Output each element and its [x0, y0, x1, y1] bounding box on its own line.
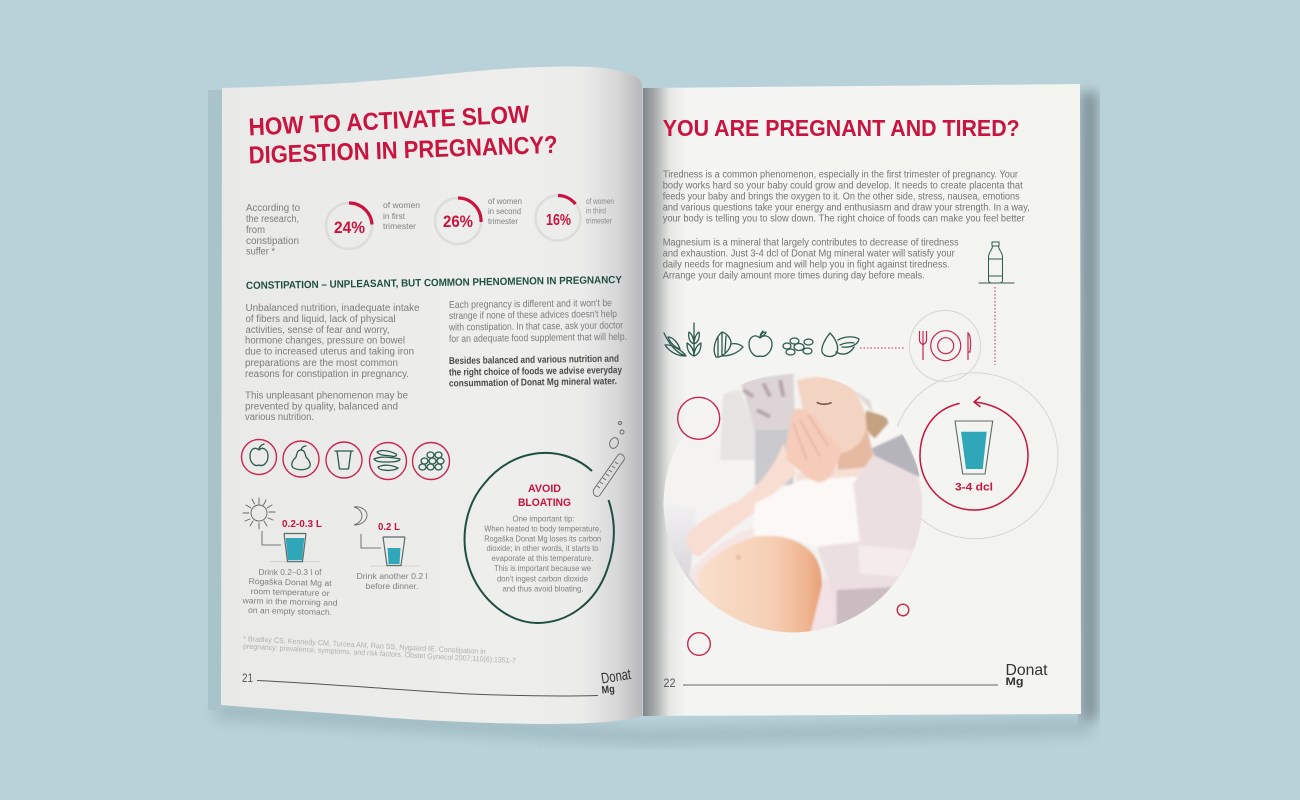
text block: magnesium: Arrange your daily amount more times during day before meals.	[663, 270, 925, 281]
text: drink 0.2-0.3 l: warm in the morning and	[241, 596, 338, 608]
label: third trimester: of women	[586, 197, 614, 206]
icon: beans in circle	[370, 442, 406, 480]
label: first trimester	[383, 201, 420, 231]
icon: plate with fork and knife	[910, 310, 980, 382]
text block: bold recommendation: Besides balanced and various nutrition and	[449, 354, 619, 367]
left forearm	[687, 443, 797, 557]
white top	[754, 476, 858, 544]
decorative circle small	[897, 604, 909, 616]
neck	[836, 426, 874, 471]
chest	[796, 466, 864, 482]
text block: magnesium	[663, 237, 959, 281]
logo: Donat Mg right: Donat	[1006, 662, 1048, 679]
strap and wrap left	[688, 527, 755, 590]
diagram: glass 0.2-0.3 L	[262, 531, 320, 562]
panel: right page	[643, 84, 1081, 716]
callout: avoid bloating: Rogaška Donat Mg loses its carbon	[484, 534, 602, 543]
text: drink another	[356, 572, 428, 591]
label: first trimester: trimester	[383, 222, 416, 231]
arrow: cycle around glass	[920, 397, 1028, 510]
callout: avoid bloating	[465, 453, 614, 623]
text block: magnesium: daily needs for magnesium and will help you in fight against tiredness.	[663, 259, 950, 270]
text: according to the research: the research,	[246, 214, 299, 225]
text block: tiredness: body works hard so your baby could grow and develop. It needs to create placenta that	[663, 180, 1023, 191]
page number 21: 21	[242, 673, 253, 685]
text block: causes of constipation: of fibers and liquid, lack of physical	[246, 314, 396, 325]
blossom branches	[720, 390, 755, 460]
logo: Donat Mg left	[600, 666, 633, 696]
text block: each pregnancy is different: with constipation. In that case, ask your doctor	[448, 320, 624, 334]
donut chart: 26% second trimester	[435, 198, 481, 244]
text: according to the research: suffer *	[246, 246, 275, 258]
connector: dotted line food to plate	[860, 347, 905, 349]
text: drink 0.2-0.3 l: Rogaška Donat Mg at	[248, 577, 332, 588]
text block: bold recommendation: the right choice of foods we advise everyday	[449, 365, 622, 378]
heading: how to activate slow digestion: DIGESTION IN PREGNANCY?	[248, 132, 558, 169]
text: according to the research: from	[246, 225, 265, 236]
logo: Donat Mg right	[1006, 662, 1048, 688]
callout: avoid bloating: AVOID	[528, 483, 561, 495]
text block: tiredness	[663, 169, 1030, 224]
navel	[736, 555, 741, 560]
icon: apple in circle	[242, 440, 276, 474]
label: third trimester: trimester	[586, 216, 612, 226]
icon: wheat	[664, 323, 701, 356]
text: drink 0.2-0.3 l: room temperature or	[250, 587, 330, 598]
hair	[865, 410, 888, 438]
arrow: dotted line from bottle	[994, 287, 996, 365]
logo: Donat Mg left: Donat	[600, 666, 633, 687]
text block: causes of constipation: various nutrition.	[245, 412, 314, 423]
callout: avoid bloating: don't ingest carbon dioxide	[497, 574, 588, 583]
text: drink 0.2-0.3 l	[241, 568, 338, 617]
subheading: constipation: CONSTIPATION – UNPLEASANT, BUT COMMON PHENOMENON IN PREGNANCY	[246, 274, 622, 292]
text block: causes of constipation: preparations are the most common	[245, 358, 398, 369]
icon: thermometer and bubbles	[593, 422, 624, 496]
callout: avoid bloating: When heated to body temperature,	[484, 524, 601, 533]
footnote: pregnancy: prevalence, symptoms, and risk factors. Obstet Gynecol 2007;110(6):1351-7	[243, 642, 516, 665]
page number 22: 22	[664, 678, 676, 690]
callout: avoid bloating: One important tip:	[512, 515, 574, 524]
text block: bold recommendation: consummation of Donat Mg mineral water.	[449, 376, 617, 389]
logo: Donat Mg right: Mg	[1006, 676, 1024, 688]
icon: nuts	[783, 338, 813, 355]
text block: causes of constipation: activities, sense of fear and worry,	[246, 325, 390, 336]
icon: sunflower seed	[714, 332, 743, 357]
icon: pear in circle	[283, 441, 319, 477]
donut chart: 24% first trimester: 24%	[334, 219, 365, 237]
illustration: large grey circle with glass	[892, 373, 1058, 539]
icon: sun	[243, 498, 275, 529]
sleeve cuff	[858, 545, 913, 577]
logo: Donat Mg left: Mg	[601, 683, 615, 696]
label: third trimester	[586, 197, 614, 226]
label: second trimester: in second	[488, 207, 521, 216]
closed eye	[817, 402, 832, 404]
dark wedge	[898, 557, 923, 590]
text block: magnesium: and exhaustion. Just 3-4 dcl of Donat Mg mineral water will satisfy your	[663, 248, 955, 259]
icon: yogurt cup in circle	[326, 442, 362, 478]
grey wedge right	[872, 434, 923, 477]
text: drink 0.2-0.3 l: Drink 0.2–0.3 l of	[258, 568, 322, 577]
text: drink another: before dinner.	[366, 582, 418, 591]
callout: avoid bloating: dioxide; in other words, it starts to	[486, 544, 599, 553]
donut chart: 24% first trimester	[326, 203, 372, 249]
photo: pregnant woman	[660, 370, 927, 637]
text block: causes of constipation: This unpleasant phenomenon may be	[245, 390, 408, 402]
heading: you are pregnant and tired: YOU ARE PREGNANT AND TIRED?	[663, 115, 1020, 141]
icon: almonds	[822, 333, 859, 356]
text block: causes of constipation: due to increased uterus and taking iron	[245, 346, 414, 358]
lower garment shade	[837, 587, 897, 627]
text: according to the research	[246, 203, 300, 258]
text block: each pregnancy is different	[448, 298, 627, 345]
lilac shade lower left	[666, 522, 701, 594]
label: third trimester: in third	[586, 206, 606, 216]
belly	[697, 536, 822, 637]
text block: causes of constipation: Unbalanced nutrition, inadequate intake	[246, 303, 420, 314]
text: drink another: Drink another 0.2 l	[356, 572, 428, 581]
label: second trimester: trimester	[488, 217, 518, 226]
text block: tiredness: and various questions take your energy and enthusiasm and draw your strength. In a way,	[663, 202, 1030, 213]
icon: bottle	[979, 242, 1014, 283]
heading: how to activate slow digestion: HOW TO ACTIVATE SLOW	[248, 101, 531, 141]
text block: magnesium: Magnesium is a mineral that largely contributes to decrease of tiredness	[663, 237, 959, 248]
callout: avoid bloating: BLOATING	[518, 497, 571, 509]
donut chart: 16% third trimester	[536, 196, 580, 240]
label: first trimester: of women	[383, 201, 420, 210]
callout: avoid bloating: and thus avoid bloating.	[502, 584, 584, 593]
callout: avoid bloating: evaporate at this temperature.	[492, 554, 594, 563]
text block: causes of constipation	[245, 303, 420, 423]
icon: glass	[955, 421, 993, 474]
cardigan	[817, 455, 922, 627]
diagram: glass 0.2 L	[361, 534, 420, 566]
towel	[866, 410, 898, 438]
book shadow	[208, 90, 1098, 745]
label: second trimester: of women	[488, 197, 522, 206]
text block: tiredness: feeds your baby and brings the oxygen to it. On the other side, stress, nausea, emotions	[663, 191, 1020, 202]
icon: moon	[354, 507, 367, 525]
hands	[786, 409, 841, 482]
footnote	[243, 634, 516, 665]
donut chart: 16% third trimester: 16%	[546, 212, 571, 229]
text block: tiredness: your body is telling you to slow down. The right choice of foods can make you feel better	[663, 213, 1025, 224]
window	[755, 428, 793, 485]
text: according to the research: constipation	[246, 236, 299, 247]
decorative circle medium	[688, 633, 710, 655]
label: second trimester	[488, 197, 522, 226]
text block: tiredness: Tiredness is a common phenomenon, especially in the first trimester of pregnancy. Your	[663, 169, 1019, 180]
text block: each pregnancy is different: Each pregnancy is different and it won't be	[449, 298, 612, 311]
text block: causes of constipation: hormone changes, pressure on bowel	[245, 336, 405, 346]
text: according to the research: According to	[246, 203, 300, 214]
text block: each pregnancy is different: for an adequate food supplement that will help.	[449, 332, 627, 345]
text block: bold recommendation	[449, 354, 622, 389]
text block: causes of constipation: reasons for constipation in pregnancy.	[245, 369, 409, 380]
label: first trimester: in first	[383, 212, 406, 221]
face	[797, 377, 866, 454]
icon: nuts in circle	[412, 442, 450, 480]
panel: left page	[221, 66, 642, 724]
donut chart: 26% second trimester: 26%	[443, 213, 473, 231]
text block: each pregnancy is different: strange if none of these advices doesn't help	[449, 309, 617, 322]
text: drink 0.2-0.3 l: on an empty stomach.	[248, 606, 332, 617]
footnote: * Bradley CS, Kennedy CM, Turcea AM, Rao SS, Nygaard IE. Constipation in	[243, 634, 486, 656]
callout: avoid bloating: This is important because we	[494, 564, 591, 573]
text block: causes of constipation: prevented by quality, balanced and	[245, 402, 398, 412]
heading: how to activate slow digestion	[248, 101, 558, 169]
icon: apple	[749, 331, 772, 356]
text: 3-4 dcl: 3-4 dcl	[955, 482, 993, 494]
text: 0.2 L: 0.2 L	[378, 522, 400, 533]
decorative circle large	[678, 397, 720, 439]
text: 0.2-0.3 L: 0.2-0.3 L	[282, 519, 322, 530]
